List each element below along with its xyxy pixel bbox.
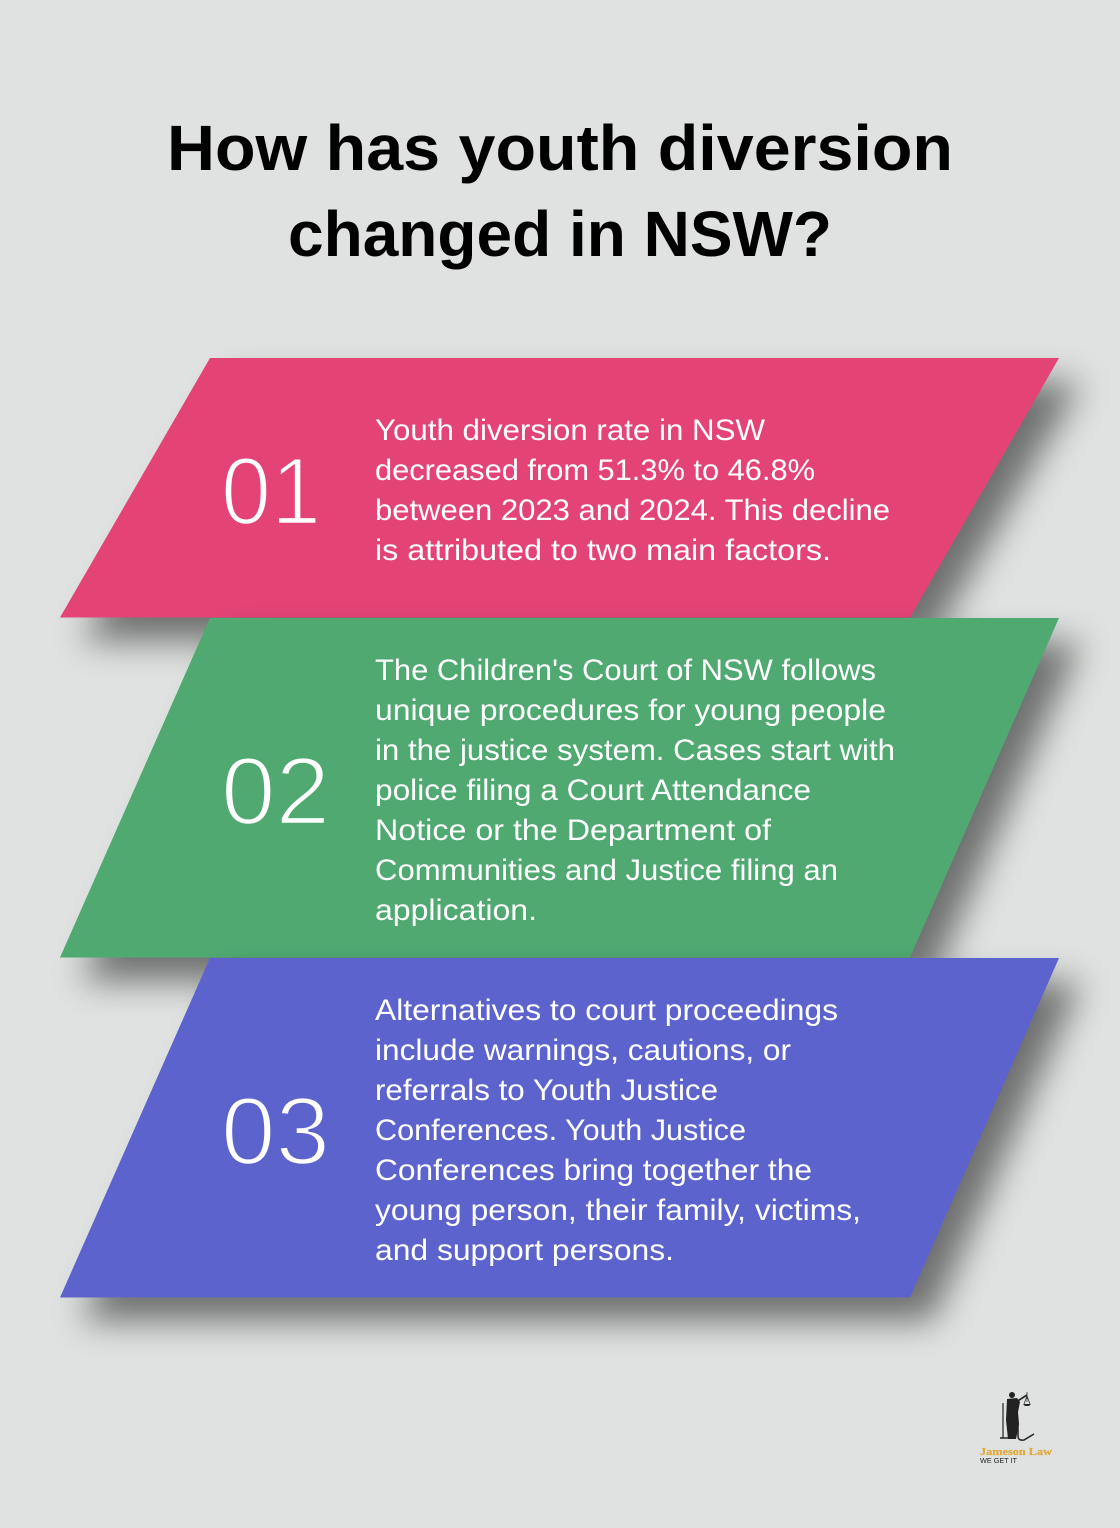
text: step 01: between 2023 and 2024. This decline <box>375 494 890 527</box>
text: step 03: Conferences. Youth Justice <box>375 1114 746 1147</box>
text: step 03: Alternatives to court proceedings <box>375 994 838 1027</box>
icon: lady justice <box>1000 1392 1034 1440</box>
number 03: 03 <box>221 1078 330 1185</box>
text: step 01: Youth diversion rate in NSW <box>375 414 766 447</box>
text: step 03: young person, their family, victims, <box>375 1194 861 1227</box>
text: step 02: Communities and Justice filing an <box>375 854 838 887</box>
title <box>167 112 953 270</box>
panel: step 02 <box>60 618 1081 981</box>
text: step 02: Notice or the Department of <box>375 814 772 847</box>
text: step 02: unique procedures for young people <box>375 694 886 727</box>
text: step 03: and support persons. <box>375 1234 674 1267</box>
text: step 03: referrals to Youth Justice <box>375 1074 718 1107</box>
title: changed in NSW? <box>288 198 832 270</box>
text: step 03 <box>375 994 861 1267</box>
text: step 02: police filing a Court Attendance <box>375 774 811 807</box>
text: step 02: application. <box>375 894 537 927</box>
number 02: 02 <box>221 738 330 845</box>
brand name: Jameson Law <box>980 1446 1052 1458</box>
panel: step 03 <box>60 958 1081 1321</box>
text: step 01: is attributed to two main factors. <box>375 534 831 567</box>
panel: step 01 <box>60 358 1081 641</box>
logo: Jameson Law <box>980 1392 1052 1465</box>
text: step 01 <box>375 414 890 567</box>
text: step 02 <box>375 654 895 927</box>
tagline: WE GET IT <box>980 1456 1017 1465</box>
text: step 01: decreased from 51.3% to 46.8% <box>375 454 815 487</box>
text: step 02: in the justice system. Cases start with <box>375 734 895 767</box>
text: step 03: Conferences bring together the <box>375 1154 812 1187</box>
title: How has youth diversion <box>167 112 953 184</box>
text: step 02: The Children's Court of NSW follows <box>375 654 876 687</box>
text: step 03: include warnings, cautions, or <box>375 1034 791 1067</box>
number 01: 01 <box>221 438 321 545</box>
